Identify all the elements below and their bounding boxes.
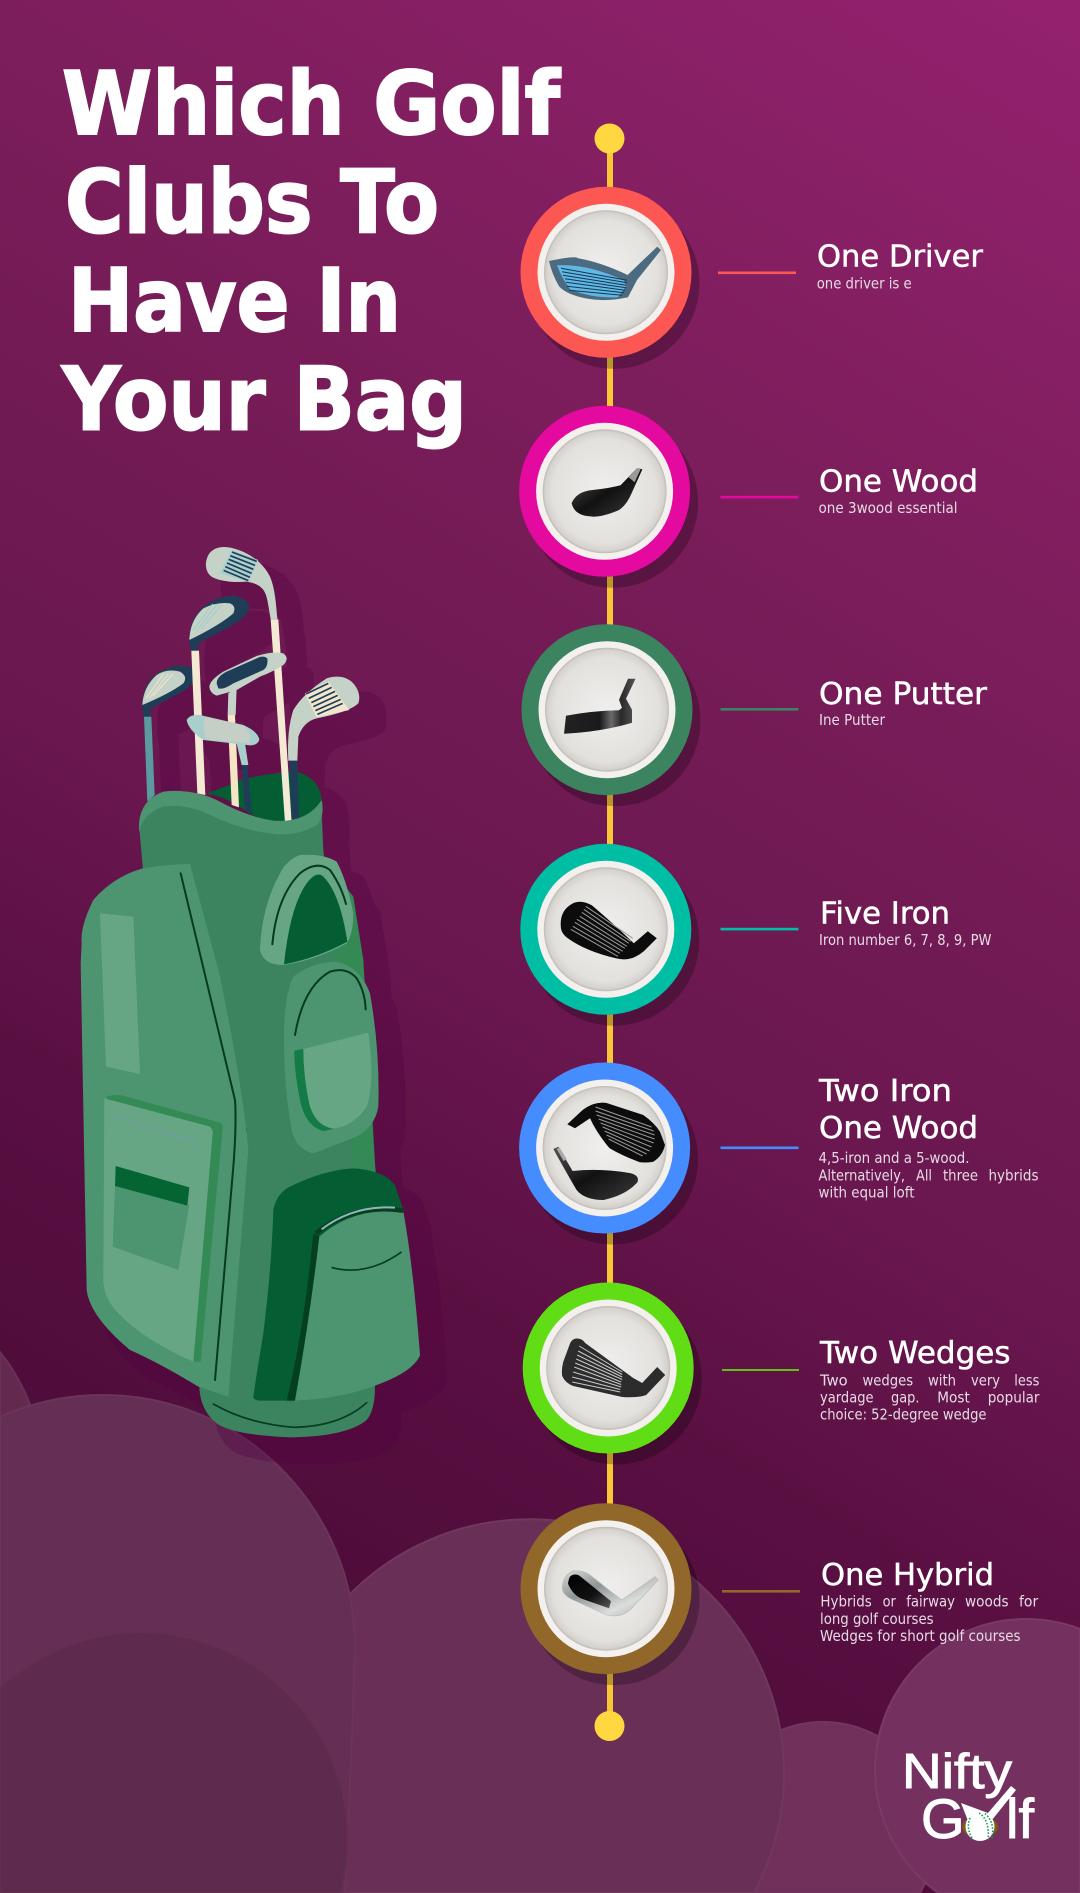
lower right pocket [253, 1168, 420, 1401]
step: One Hybrid [520, 1503, 1039, 1685]
top dot [594, 124, 624, 154]
description: one 3wood essential [818, 499, 958, 517]
bag base seam [213, 1403, 367, 1427]
description [818, 1149, 1039, 1202]
connector [720, 928, 798, 930]
description: Two [819, 1372, 848, 1390]
heading: One Driver [817, 240, 984, 274]
bag left panel [81, 864, 248, 1397]
heading [818, 1074, 978, 1146]
badge: driver [520, 187, 700, 369]
golf bag with clubs [81, 547, 420, 1437]
title: Your Bag [61, 348, 467, 450]
title: Have In [68, 250, 401, 352]
heading: Two Wedges [819, 1336, 1010, 1371]
connector [720, 708, 798, 711]
description: Most [937, 1389, 970, 1407]
connector [722, 1590, 800, 1593]
description: for [1019, 1593, 1039, 1611]
logo: Nifty Golf [902, 1745, 1034, 1850]
bag body [139, 800, 375, 1437]
description: yardage [820, 1389, 874, 1407]
title: Clubs To [65, 152, 439, 254]
bottom dot [594, 1711, 624, 1741]
description: with [928, 1372, 956, 1390]
description: Wedges for short golf courses [820, 1627, 1021, 1645]
clouds [0, 1352, 1080, 1893]
logo: Nifty Golf: Nifty [902, 1745, 1013, 1799]
description: long golf courses [820, 1610, 934, 1628]
center seam [181, 873, 236, 1380]
description: one driver is e [817, 274, 912, 292]
badge: iron [520, 844, 699, 1026]
heading: One Wood [819, 1111, 978, 1146]
description: three [943, 1167, 978, 1185]
step: Two Wedges [523, 1282, 1040, 1464]
description: wedges [862, 1372, 913, 1390]
description: or [883, 1593, 897, 1611]
description: less [1014, 1372, 1039, 1390]
description: 4,5-iron and a 5-wood. [818, 1149, 970, 1167]
badge: iron and wood [519, 1062, 698, 1244]
description: hybrids [988, 1167, 1039, 1185]
description: Alternatively, [818, 1167, 905, 1185]
step: Two Iron One Wood [519, 1062, 1039, 1244]
club [961, 1786, 1016, 1821]
badge: putter [522, 624, 700, 806]
description: very [971, 1372, 1000, 1390]
description: fairway [906, 1593, 955, 1611]
badge: hybrid [520, 1503, 700, 1685]
connector [720, 496, 798, 498]
logo: Nifty Golf: G [921, 1787, 965, 1850]
badge: wedge [523, 1282, 702, 1464]
upper right pocket [260, 855, 353, 965]
timeline line [594, 124, 624, 1741]
bag collar [139, 791, 323, 834]
club: upper iron [206, 547, 292, 823]
connector [720, 1146, 798, 1149]
title: Which Golf [62, 53, 561, 155]
badge: wood [519, 406, 698, 588]
ball [962, 1812, 998, 1841]
step: One Driver [520, 187, 984, 369]
connector [718, 272, 796, 274]
club: wood [189, 596, 249, 795]
description: All [916, 1167, 932, 1185]
description [820, 1593, 1039, 1645]
step: Five Iron [520, 844, 992, 1026]
club: middle putter [209, 652, 287, 807]
heading: One Putter [819, 677, 988, 712]
heading: One Hybrid [821, 1558, 994, 1593]
step: One Putter [522, 624, 988, 806]
club: lower putter [187, 715, 259, 813]
heading: One Wood [819, 465, 978, 500]
description: Hybrids [820, 1593, 872, 1611]
club: right iron [288, 677, 359, 823]
description [819, 1372, 1040, 1424]
connector [722, 1369, 799, 1371]
panel strap [100, 913, 140, 1074]
lower left pocket [103, 1095, 223, 1362]
bag shadow [102, 568, 441, 1458]
bag strip [327, 863, 377, 1183]
club: left wood [142, 666, 198, 802]
description: popular [988, 1389, 1040, 1407]
heading: Five Iron [820, 896, 950, 931]
description: woods [965, 1593, 1009, 1611]
heading: Two Iron [818, 1074, 952, 1109]
title [61, 53, 561, 450]
description: Ine Putter [819, 711, 886, 729]
description: choice: 52-degree wedge [820, 1406, 986, 1424]
logo: Nifty Golf: lf [1006, 1787, 1034, 1850]
description: with equal loft [818, 1184, 915, 1202]
mid right pocket [284, 962, 379, 1153]
bag opening [207, 773, 322, 823]
description: Iron number 6, 7, 8, 9, PW [819, 931, 992, 949]
step: One Wood [519, 406, 978, 588]
description: gap. [891, 1389, 920, 1407]
